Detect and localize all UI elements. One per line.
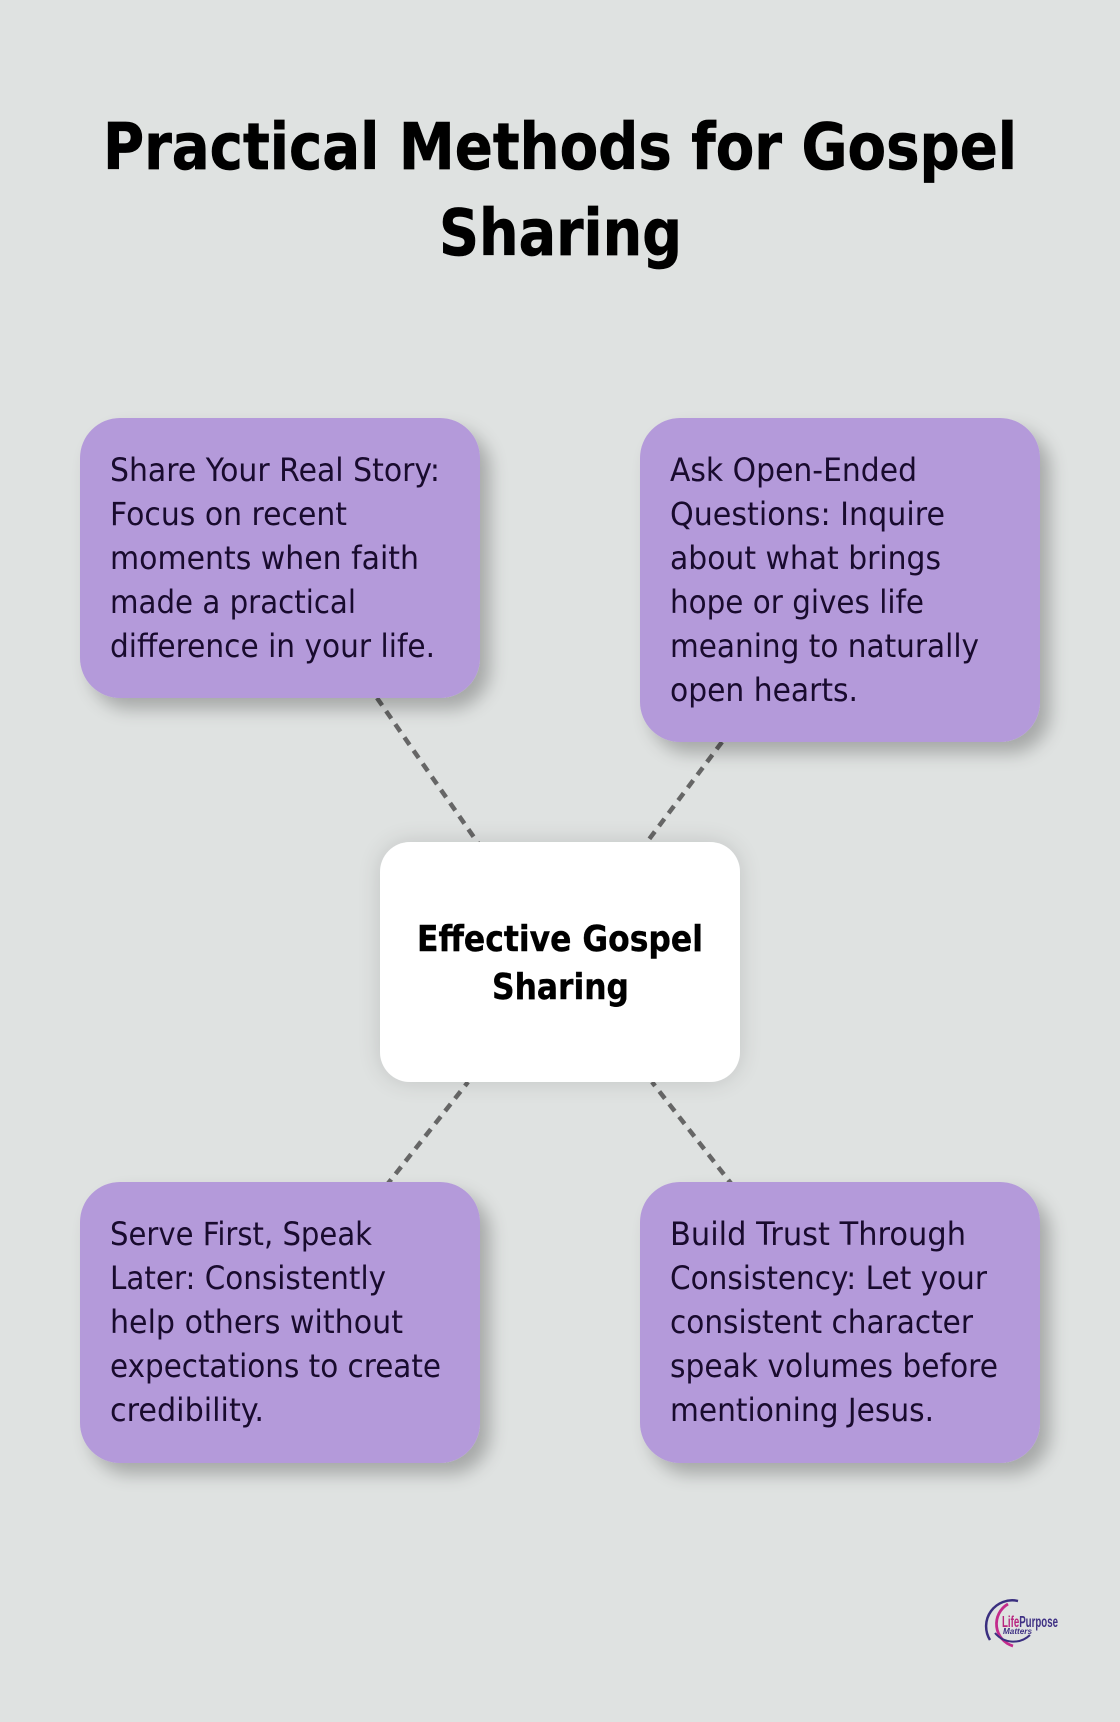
connector: top left: [377, 698, 480, 846]
panel: build trust through consistency: consistent character: [670, 1303, 974, 1341]
panel: ask open-ended questions: about what brings: [670, 539, 941, 577]
panel: share your real story: [80, 418, 480, 698]
panel: center effective gospel sharing: Effective Gospel: [417, 919, 703, 960]
panel: ask open-ended questions: [640, 418, 1040, 742]
title: Sharing: [439, 197, 682, 271]
panel: ask open-ended questions: Ask Open-Ended: [670, 451, 917, 489]
connector: bottom left: [386, 1082, 468, 1186]
panel: serve first speak later: Later: Consistently: [110, 1259, 386, 1297]
icon: life purpose matters logo: Matters: [1003, 1627, 1033, 1636]
icon: life purpose matters logo: LifePurpose: [1002, 1614, 1058, 1631]
panel: serve first speak later: expectations to create: [110, 1347, 441, 1385]
panel: build trust through consistency: speak volumes before: [670, 1347, 998, 1385]
panel: build trust through consistency: [640, 1182, 1040, 1463]
panel: serve first speak later: credibility.: [110, 1391, 264, 1429]
icon: life purpose matters logo: [986, 1600, 1058, 1646]
panel: build trust through consistency: Consistency: Let your: [670, 1259, 988, 1297]
panel: share your real story: Share Your Real Story:: [110, 451, 440, 489]
connector: bottom right: [652, 1082, 733, 1186]
panel: serve first speak later: [80, 1182, 480, 1463]
title: [103, 111, 1017, 271]
title: Practical Methods for Gospel: [103, 111, 1017, 185]
panel: ask open-ended questions: Questions: Inquire: [670, 495, 945, 533]
panel: center effective gospel sharing: Sharing: [492, 967, 629, 1008]
panel: share your real story: made a practical: [110, 583, 356, 621]
panel: build trust through consistency: mentioning Jesus.: [670, 1391, 934, 1429]
connector: top right: [644, 742, 722, 846]
panel: share your real story: Focus on recent: [110, 495, 347, 533]
panel: build trust through consistency: Build Trust Through: [670, 1215, 966, 1253]
panel: share your real story: difference in your life.: [110, 627, 435, 665]
panel: share your real story: moments when faith: [110, 539, 419, 577]
panel: ask open-ended questions: open hearts.: [670, 671, 858, 709]
panel: serve first speak later: help others without: [110, 1303, 403, 1341]
panel: ask open-ended questions: meaning to naturally: [670, 627, 979, 665]
panel: serve first speak later: Serve First, Speak: [110, 1215, 372, 1253]
panel: center effective gospel sharing: [380, 842, 740, 1082]
panel: ask open-ended questions: hope or gives life: [670, 583, 924, 621]
